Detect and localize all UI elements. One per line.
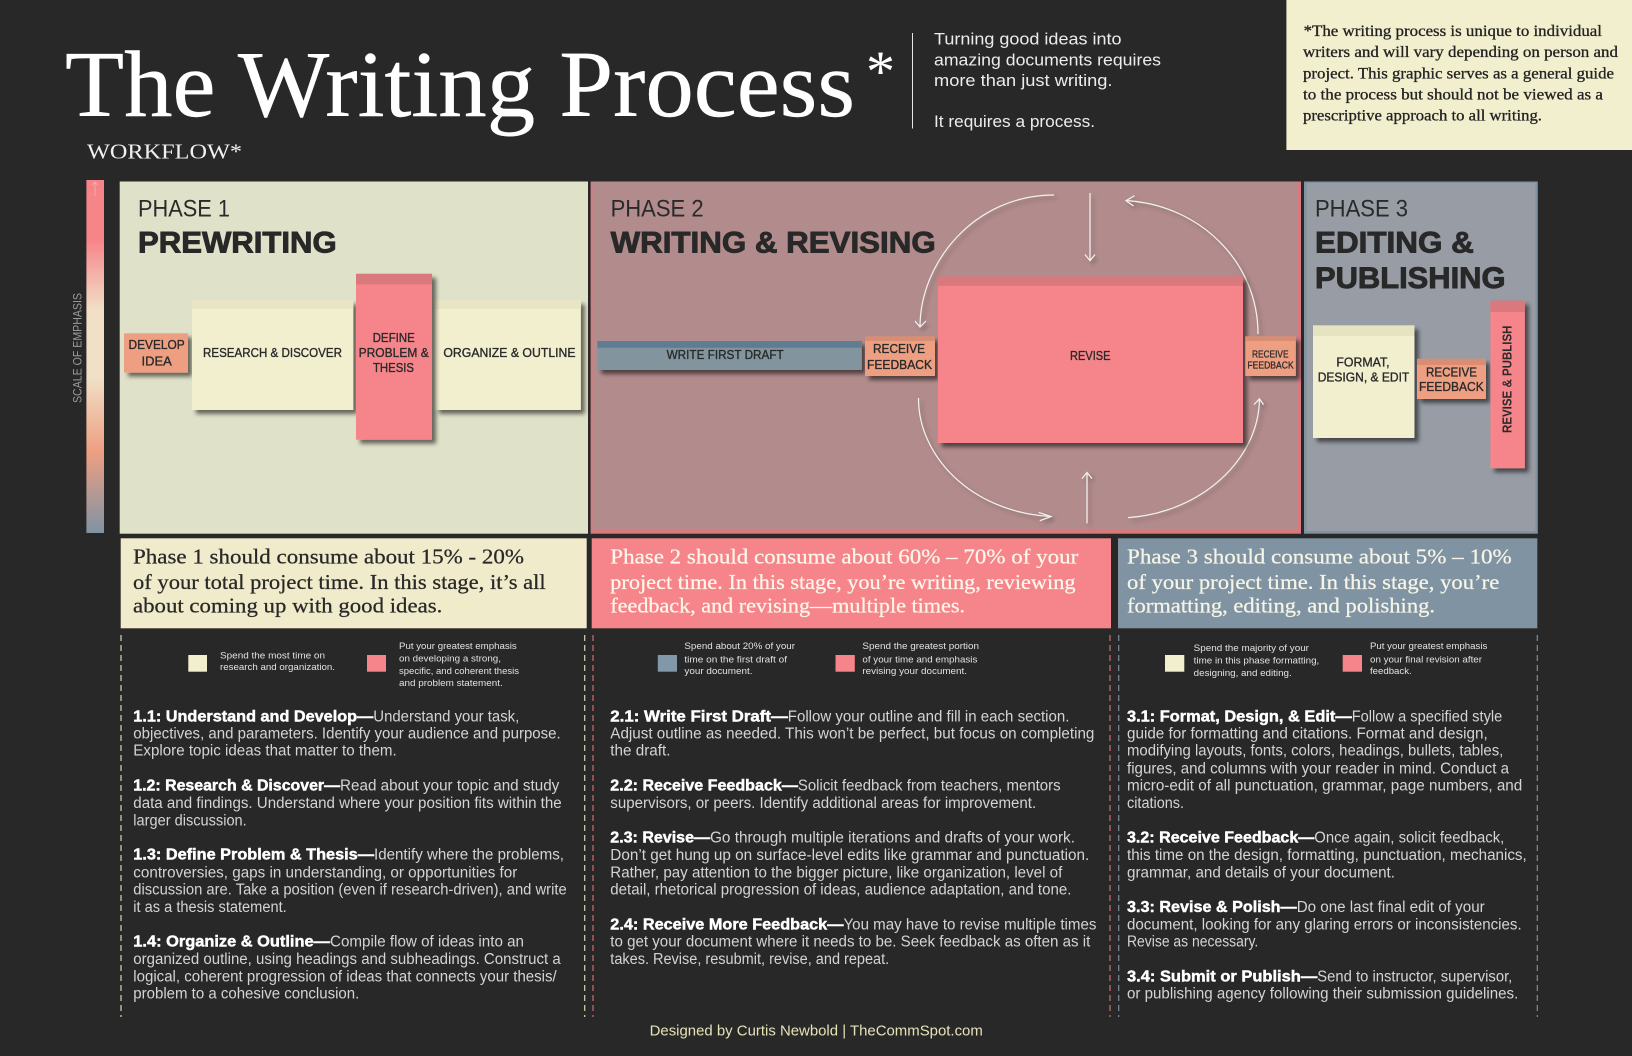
step 3.3: Revise as necessary. bbox=[1127, 934, 1258, 951]
step 2.3: detail, rhetorical progression of ideas, audience adaptation, and tone. bbox=[610, 882, 1071, 898]
phase 1 heading: PREWRITING bbox=[138, 226, 337, 260]
legend: phase 1: and problem statement. bbox=[399, 678, 503, 689]
step 2.1 bbox=[610, 709, 1094, 760]
box: write first draft bbox=[597, 341, 862, 370]
step 2.4: to get your document where it needs to be. Seek feedback as often as it bbox=[610, 934, 1091, 951]
callout: phase 3 time bbox=[1118, 538, 1537, 628]
header divider and intro text: amazing documents requires bbox=[934, 52, 1161, 70]
callout: disclaimer note: to the process but should not be viewed as a bbox=[1303, 86, 1603, 104]
step 1.3 bbox=[133, 847, 567, 916]
legend: phase 1: research and organization. bbox=[220, 662, 335, 673]
step 2.3 bbox=[610, 830, 1089, 898]
step 1.2: larger discussion. bbox=[133, 812, 247, 830]
step 1.4: problem to a cohesive conclusion. bbox=[133, 986, 359, 1003]
scale of emphasis bar bbox=[72, 180, 104, 533]
callout: phase 3 time: formatting, editing, and polishing. bbox=[1127, 594, 1435, 618]
step 1.3: Identify where the problems, bbox=[374, 847, 564, 864]
callout: phase 3 time: of your project time. In this stage, you’re bbox=[1127, 570, 1499, 594]
box: write first draft: WRITE FIRST DRAFT bbox=[667, 347, 784, 362]
box: develop idea: DEVELOP bbox=[128, 337, 185, 352]
callout: phase 2 time: project time. In this stage, you’re writing, reviewing bbox=[610, 570, 1076, 594]
step 1.3: it as a thesis statement. bbox=[133, 899, 287, 916]
box: receive feedback: RECEIVE bbox=[1426, 364, 1477, 379]
step 2.1: 2.1: Write First Draft— bbox=[610, 709, 788, 726]
arrow: curve from revise top right bbox=[1126, 196, 1258, 334]
step 3.1: 3.1: Format, Design, & Edit— bbox=[1127, 709, 1352, 726]
text block: phase 3 steps bbox=[1127, 709, 1527, 1003]
phase 1 heading: PHASE 1 bbox=[138, 196, 230, 222]
step 1.3: 1.3: Define Problem & Thesis— bbox=[133, 847, 375, 864]
step 1.1: Explore topic ideas that matter to them. bbox=[133, 743, 397, 760]
title: The Writing Process bbox=[65, 33, 855, 137]
legend: phase 1: Put your greatest emphasis bbox=[399, 641, 517, 652]
phase 2 heading: PHASE 2 bbox=[611, 196, 704, 222]
box: organize and outline bbox=[435, 300, 581, 410]
workflow label: WORKFLOW* bbox=[87, 140, 242, 164]
phase 1 heading bbox=[138, 196, 337, 260]
step 2.3: 2.3: Revise— bbox=[610, 830, 711, 847]
step 3.1: micro-edit of all punctuation, grammar, page numbers, and bbox=[1127, 778, 1522, 795]
step 2.2 bbox=[610, 778, 1061, 812]
step 3.4: 3.4: Submit or Publish— bbox=[1127, 968, 1318, 985]
box: format design edit: FORMAT, bbox=[1336, 354, 1390, 369]
step 3.3 bbox=[1127, 899, 1522, 951]
step 1.4 bbox=[133, 934, 561, 1003]
step 1.3: controversies, gaps in understanding, or opportunities for bbox=[133, 864, 517, 881]
step 2.4: 2.4: Receive More Feedback— bbox=[610, 917, 844, 934]
step 3.2 bbox=[1127, 830, 1527, 881]
step 3.3: Do one last final edit of your bbox=[1297, 899, 1485, 916]
step 1.1: Understand your task, bbox=[373, 709, 519, 726]
box: receive feedback small: RECEIVE bbox=[1252, 348, 1288, 360]
header divider and intro text: more than just writing. bbox=[934, 72, 1112, 90]
box: define problem and thesis: PROBLEM & bbox=[359, 345, 429, 360]
swatch: problem and thesis bbox=[367, 655, 386, 672]
step 3.4 bbox=[1127, 968, 1518, 1003]
panel: phase 3 editing and publishing bbox=[1304, 182, 1538, 534]
header divider and intro text: Turning good ideas into bbox=[934, 30, 1122, 48]
step 2.1: Adjust outline as needed. This won’t be perfect, but focus on completing bbox=[610, 726, 1094, 743]
legend: phase 2: time on the first draft of bbox=[684, 654, 787, 665]
box: define problem and thesis: THESIS bbox=[373, 360, 414, 375]
text block: phase 1 steps bbox=[133, 709, 567, 1003]
phase 3 heading: EDITING & bbox=[1315, 226, 1474, 260]
scale of emphasis bar: SCALE OF EMPHASIS bbox=[72, 293, 84, 403]
swatch: revising bbox=[836, 655, 855, 672]
footer credit: Designed by Curtis Newbold | TheCommSpot.com bbox=[650, 1023, 983, 1040]
callout: phase 1 time bbox=[121, 538, 587, 628]
step 2.2: Solicit feedback from teachers, mentors bbox=[798, 778, 1061, 795]
step 2.3: Go through multiple iterations and drafts of your work. bbox=[710, 830, 1075, 847]
step 1.2: Read about your topic and study bbox=[340, 778, 560, 795]
box: research and discover: RESEARCH & DISCOVER bbox=[203, 345, 342, 360]
panel: phase 2 writing and revising bbox=[591, 182, 1301, 534]
swatch: format and edit bbox=[1165, 655, 1184, 672]
box: receive feedback: FEEDBACK bbox=[867, 357, 932, 372]
box: format design edit bbox=[1313, 325, 1414, 438]
step 2.4 bbox=[610, 917, 1097, 968]
legend: phase 3: on your final revision after bbox=[1370, 654, 1482, 665]
box: organize and outline: ORGANIZE & OUTLINE bbox=[443, 345, 576, 360]
step 2.1: Follow your outline and fill in each section. bbox=[788, 709, 1069, 726]
step 1.3: discussion are. Take a position (even if research-driven), and write bbox=[133, 882, 567, 898]
step 2.1: the draft. bbox=[610, 743, 670, 760]
step 1.1 bbox=[133, 709, 561, 760]
legend: phase 1: on developing a strong, bbox=[399, 653, 501, 664]
legend: phase 2: revising your document. bbox=[862, 666, 967, 677]
box: receive feedback: FEEDBACK bbox=[1419, 379, 1484, 394]
callout: phase 2 time: feedback, and revising—multiple times. bbox=[610, 594, 965, 618]
legend: phase 3: time in this phase formatting, bbox=[1194, 655, 1319, 666]
callout: phase 2 time bbox=[592, 538, 1111, 628]
box: receive feedback: RECEIVE bbox=[873, 341, 925, 356]
callout: disclaimer note bbox=[1286, 0, 1632, 150]
step 2.2: supervisors, or peers. Identify additional areas for improvement. bbox=[610, 795, 1036, 812]
callout: disclaimer note: writers and will vary depending on person and bbox=[1303, 44, 1618, 61]
callout: phase 1 time: about coming up with good ideas. bbox=[133, 594, 442, 618]
legend: phase 3: Spend the majority of your bbox=[1194, 643, 1309, 654]
box: define problem and thesis: DEFINE bbox=[373, 330, 415, 345]
step 3.2: 3.2: Receive Feedback— bbox=[1127, 830, 1315, 847]
legend: phase 2: your document. bbox=[684, 666, 752, 677]
step 3.1: modifying layouts, fonts, colors, headings, bullets, tables, bbox=[1127, 743, 1503, 760]
legend: phase 3 bbox=[1165, 641, 1488, 679]
legend: phase 1 bbox=[188, 641, 519, 689]
swatch: research and organization bbox=[188, 655, 207, 672]
box: format design edit: DESIGN, & EDIT bbox=[1318, 370, 1409, 385]
box: receive feedback bbox=[1417, 359, 1486, 399]
step 3.1: Follow a specified style bbox=[1352, 709, 1502, 726]
step 2.3: Don’t get hung up on surface-level edits like grammar and punctuation. bbox=[610, 847, 1089, 864]
step 3.3: document, looking for any glaring errors or inconsistencies. bbox=[1127, 917, 1522, 934]
phase 3 heading bbox=[1315, 196, 1506, 295]
legend: phase 1: specific, and coherent thesis bbox=[399, 666, 519, 677]
box: develop idea: IDEA bbox=[142, 353, 172, 368]
box: receive feedback small: FEEDBACK bbox=[1247, 360, 1294, 372]
step 1.1: 1.1: Understand and Develop— bbox=[133, 709, 374, 726]
callout: phase 1 time: Phase 1 should consume about 15% - 20% bbox=[133, 544, 524, 568]
header divider and intro text bbox=[912, 30, 1161, 131]
phase 3 heading: PHASE 3 bbox=[1315, 196, 1408, 222]
step 1.4: Compile flow of ideas into an bbox=[330, 934, 524, 951]
step 2.4: takes. Revise, resubmit, revise, and repeat. bbox=[610, 951, 889, 968]
title asterisk: * bbox=[866, 39, 895, 104]
step 3.1: guide for formatting and citations. Format and design, bbox=[1127, 726, 1488, 743]
step 3.1 bbox=[1127, 709, 1522, 812]
box: develop idea bbox=[124, 333, 188, 373]
box: research and discover bbox=[192, 300, 353, 410]
box: receive feedback small bbox=[1245, 336, 1296, 376]
legend: phase 3: Put your greatest emphasis bbox=[1370, 641, 1488, 652]
step 1.4: organized outline, using headings and subheadings. Construct a bbox=[133, 951, 561, 968]
step 1.2 bbox=[133, 778, 562, 830]
box: revise and publish: REVISE & PUBLISH bbox=[1500, 326, 1514, 433]
box: revise bbox=[938, 276, 1243, 443]
step 1.4: logical, coherent progression of ideas that connects your thesis/ bbox=[133, 969, 557, 986]
step 1.2: data and findings. Understand where your position fits within the bbox=[133, 795, 562, 812]
step 2.3: Rather, pay attention to the bigger picture, like organization, level of bbox=[610, 864, 1063, 881]
step 1.2: 1.2: Research & Discover— bbox=[133, 778, 341, 795]
legend: phase 2 bbox=[658, 641, 979, 677]
arrow: curve bottom left bbox=[918, 398, 1051, 521]
callout: disclaimer note: prescriptive approach to all writing. bbox=[1303, 108, 1542, 124]
callout: phase 3 time: Phase 3 should consume about 5% – 10% bbox=[1127, 544, 1512, 568]
step 2.4: You may have to revise multiple times bbox=[844, 917, 1097, 934]
box: revise: REVISE bbox=[1070, 348, 1111, 363]
legend: phase 1: Spend the most time on bbox=[220, 650, 325, 661]
step 1.4: 1.4: Organize & Outline— bbox=[133, 934, 331, 951]
legend: phase 2: Spend the greatest portion bbox=[862, 641, 979, 652]
arrow: curve into first feedback bbox=[915, 195, 1054, 327]
callout: disclaimer note: project. This graphic serves as a general guide bbox=[1303, 66, 1614, 82]
legend: phase 2: Spend about 20% of your bbox=[684, 641, 795, 652]
legend: phase 2: of your time and emphasis bbox=[862, 654, 978, 665]
step 3.3: 3.3: Revise & Polish— bbox=[1127, 899, 1297, 916]
arrow: down into revise bbox=[1085, 193, 1095, 261]
arrow: up into revise bbox=[1082, 472, 1092, 523]
step 3.2: Once again, solicit feedback, bbox=[1314, 830, 1504, 847]
text block: phase 2 steps bbox=[610, 709, 1097, 968]
callout: phase 2 time: Phase 2 should consume about 60% – 70% of your bbox=[610, 544, 1078, 568]
step 3.1: citations. bbox=[1127, 795, 1184, 812]
phase 2 heading: WRITING & REVISING bbox=[611, 226, 936, 260]
step 3.4: or publishing agency following their submission guidelines. bbox=[1127, 986, 1518, 1003]
step 2.2: 2.2: Receive Feedback— bbox=[610, 778, 798, 795]
callout: phase 1 time: of your total project time. In this stage, it’s all bbox=[133, 570, 546, 594]
phase 2 heading bbox=[611, 196, 936, 260]
step 3.1: figures, and columns with your reader in mind. Conduct a bbox=[1127, 760, 1509, 778]
swatch: first draft bbox=[658, 655, 677, 672]
box: define problem and thesis bbox=[356, 274, 432, 440]
box: receive feedback bbox=[865, 336, 935, 376]
phase 3 heading: PUBLISHING bbox=[1315, 262, 1506, 295]
legend: phase 3: feedback. bbox=[1370, 666, 1412, 677]
step 1.1: objectives, and parameters. Identify your audience and purpose. bbox=[133, 726, 561, 743]
box: revise and publish bbox=[1490, 301, 1525, 468]
header divider and intro text: It requires a process. bbox=[934, 113, 1095, 131]
step 3.2: this time on the design, formatting, punctuation, mechanics, bbox=[1127, 847, 1527, 864]
panel: phase 1 prewriting bbox=[120, 182, 588, 534]
legend: phase 3: designing, and editing. bbox=[1194, 668, 1292, 679]
swatch: final revision bbox=[1343, 655, 1362, 672]
arrow: curve bottom right bbox=[1128, 399, 1264, 518]
step 3.2: grammar, and details of your document. bbox=[1127, 864, 1395, 881]
step 3.4: Send to instructor, supervisor, bbox=[1317, 968, 1512, 985]
callout: disclaimer note: *The writing process is unique to individual bbox=[1304, 23, 1602, 40]
